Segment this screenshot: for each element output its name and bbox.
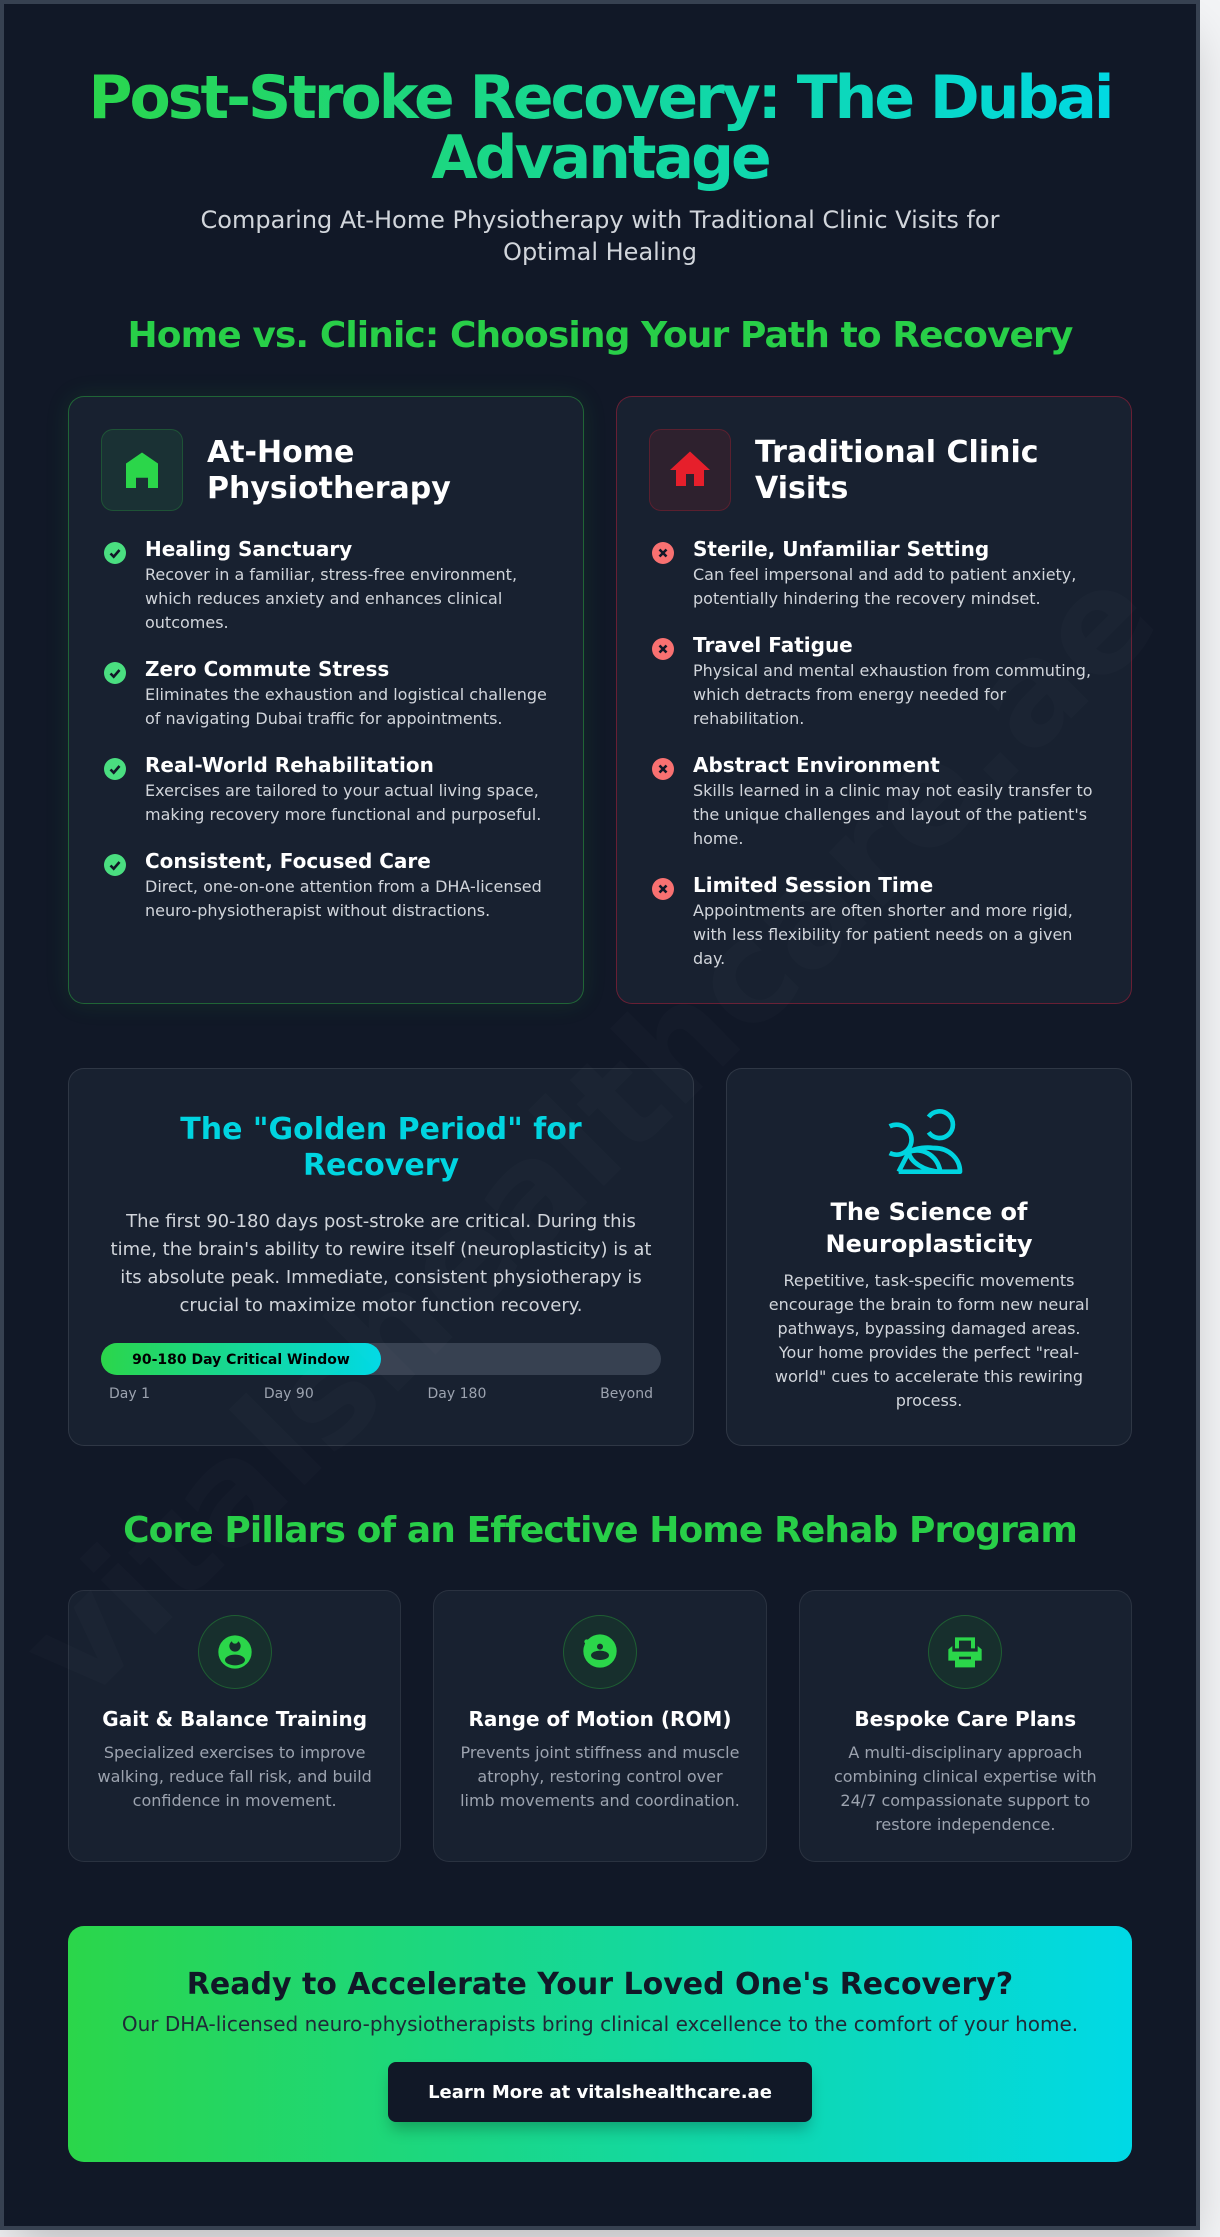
item: abstract environment: the unique challenges and layout of the patient's [693,805,1087,824]
item: abstract environment [652,753,1093,848]
pillar text [834,1743,1097,1834]
item: limited session time: day. [693,949,725,968]
pillar: gait and balance [68,1590,401,1862]
item: healing sanctuary: Healing Sanctuary [145,537,352,561]
item: healing sanctuary: Recover in a familiar, stress-free environment, [145,565,517,584]
item: limited session time: Appointments are often shorter and more rigid, [693,901,1073,920]
pillar text: walking, reduce fall risk, and build [97,1767,372,1786]
item: travel fatigue: Physical and mental exhaustion from commuting, [693,661,1091,680]
item: real-world rehabilitation: Exercises are tailored to your actual living space, [145,781,539,800]
golden period heading: The "Golden Period" for [180,1112,582,1147]
critical window fill [101,1343,381,1375]
item: healing sanctuary: outcomes. [145,613,229,632]
subtitle: Comparing At-Home Physiotherapy with Traditional Clinic Visits for [201,206,999,234]
neuroplasticity text: world" cues to accelerate this rewiring [775,1367,1083,1386]
neuroplasticity heading: Neuroplasticity [826,1230,1032,1258]
item: abstract environment: home. [693,829,743,848]
item: real-world rehabilitation: making recovery more functional and purposeful. [145,805,541,824]
icon: gait person [198,1615,272,1689]
cta button [388,2062,812,2122]
timeline labels [109,1386,653,1402]
critical window fill: 90-180 Day Critical Window [132,1352,350,1368]
panel title: At-Home [207,435,354,470]
neuroplasticity text: pathways, bypassing damaged areas. [777,1319,1081,1338]
timeline labels: Day 180 [428,1386,486,1402]
neuroplasticity text [769,1271,1089,1410]
item: travel fatigue: Travel Fatigue [693,633,853,657]
pillar title: Range of Motion (ROM) [468,1707,731,1731]
item: zero commute stress: Zero Commute Stress [145,657,389,681]
item: limited session time [652,873,1073,968]
neuroplasticity heading: The Science of [830,1198,1027,1226]
pillar text: A multi-disciplinary approach [848,1743,1082,1762]
panel title [207,435,451,506]
pillar text [97,1743,372,1810]
panel: science of neuroplasticity [726,1068,1132,1446]
item: real-world rehabilitation: Real-World Rehabilitation [145,753,434,777]
item: sterile setting: potentially hindering the recovery mindset. [693,589,1041,608]
neuroplasticity text: encourage the brain to form new neural [769,1295,1089,1314]
timeline labels: Day 90 [264,1386,314,1402]
title: Advantage [431,123,769,193]
item: sterile setting [652,537,1076,608]
golden period heading [180,1112,582,1183]
item: consistent focused care: Direct, one-on-one attention from a DHA-licensed [145,877,542,896]
call to action panel [68,1926,1132,2162]
golden period text: The first 90-180 days post-stroke are critical. During this [126,1211,636,1232]
golden period text: time, the brain's ability to rewire itself (neuroplasticity) is at [111,1239,651,1260]
subtitle: Optimal Healing [503,238,697,266]
item: zero commute stress: Eliminates the exhaustion and logistical challenge [145,685,547,704]
pillar text: 24/7 compassionate support to [840,1791,1090,1810]
panel: golden period [68,1068,694,1446]
golden period text: crucial to maximize motor function recovery. [179,1295,583,1316]
pillar text: confidence in movement. [133,1791,337,1810]
item: zero commute stress [104,657,547,728]
heading: core pillars: Core Pillars of an Effective Home Rehab Program [123,1510,1077,1551]
pillar: bespoke care plans [799,1590,1132,1862]
item: travel fatigue [652,633,1091,728]
icon: red house [649,429,731,511]
neuroplasticity text: Your home provides the perfect "real- [779,1343,1079,1362]
neuroplasticity text: process. [896,1391,962,1410]
watermark: vitalshealthcare.ae [0,534,1188,1732]
cta button: Learn More at vitalshealthcare.ae [428,2082,772,2103]
item: consistent focused care [104,849,542,920]
cta heading: Ready to Accelerate Your Loved One's Recovery? [187,1967,1013,2002]
golden period heading: Recovery [303,1148,459,1183]
panel: at-home physiotherapy [68,396,584,1004]
icon: motion person [563,1615,637,1689]
item: abstract environment: Abstract Environment [693,753,940,777]
item: limited session time: Limited Session Time [693,873,933,897]
item: consistent focused care: Consistent, Focused Care [145,849,431,873]
item: sterile setting: Sterile, Unfamiliar Setting [693,537,989,561]
neuroplasticity text: Repetitive, task-specific movements [783,1271,1075,1290]
timeline bar [101,1343,661,1375]
icon: printer [928,1615,1002,1689]
item: travel fatigue: which detracts from energy needed for [693,685,1006,704]
pillar title: Bespoke Care Plans [854,1707,1076,1731]
item: zero commute stress: of navigating Dubai traffic for appointments. [145,709,503,728]
item: consistent focused care: neuro-physiotherapist without distractions. [145,901,490,920]
panel title: Traditional Clinic [755,435,1039,470]
title: Post-Stroke Recovery: The Dubai [89,63,1111,133]
subtitle [201,206,1000,266]
pillar: range of motion [433,1590,767,1862]
pillar text: restore independence. [875,1815,1055,1834]
golden period text: its absolute peak. Immediate, consistent physiotherapy is [120,1267,642,1288]
pillar text: Prevents joint stiffness and muscle [461,1743,739,1762]
item: sterile setting: Can feel impersonal and add to patient anxiety, [693,565,1076,584]
item: healing sanctuary: which reduces anxiety and enhances clinical [145,589,502,608]
neuroplasticity heading [826,1198,1032,1258]
title [68,68,1132,198]
icon: green house [101,429,183,511]
golden period text [111,1211,651,1316]
panel: traditional clinic visits [616,396,1132,1004]
cta text: Our DHA-licensed neuro-physiotherapists bring clinical excellence to the comfort of your home. [122,2012,1078,2036]
panel title: Visits [755,471,848,506]
pillar text: limb movements and coordination. [460,1791,740,1810]
timeline labels: Day 1 [109,1386,150,1402]
item: healing sanctuary [104,537,517,632]
pillar title: Gait & Balance Training [102,1707,367,1731]
pillar text: atrophy, restoring control over [477,1767,723,1786]
pillar text: combining clinical expertise with [834,1767,1097,1786]
item: limited session time: with less flexibility for patient needs on a given [693,925,1072,944]
timeline labels: Beyond [600,1386,653,1402]
pillar text: Specialized exercises to improve [104,1743,366,1762]
heading: home vs clinic: Home vs. Clinic: Choosing Your Path to Recovery [128,315,1072,356]
item: real-world rehabilitation [104,753,541,824]
pillar text [460,1743,740,1810]
panel title: Physiotherapy [207,471,451,506]
panel title [755,435,1039,506]
icon: users outline [888,1109,962,1174]
item: travel fatigue: rehabilitation. [693,709,804,728]
item: abstract environment: Skills learned in a clinic may not easily transfer to [693,781,1093,800]
